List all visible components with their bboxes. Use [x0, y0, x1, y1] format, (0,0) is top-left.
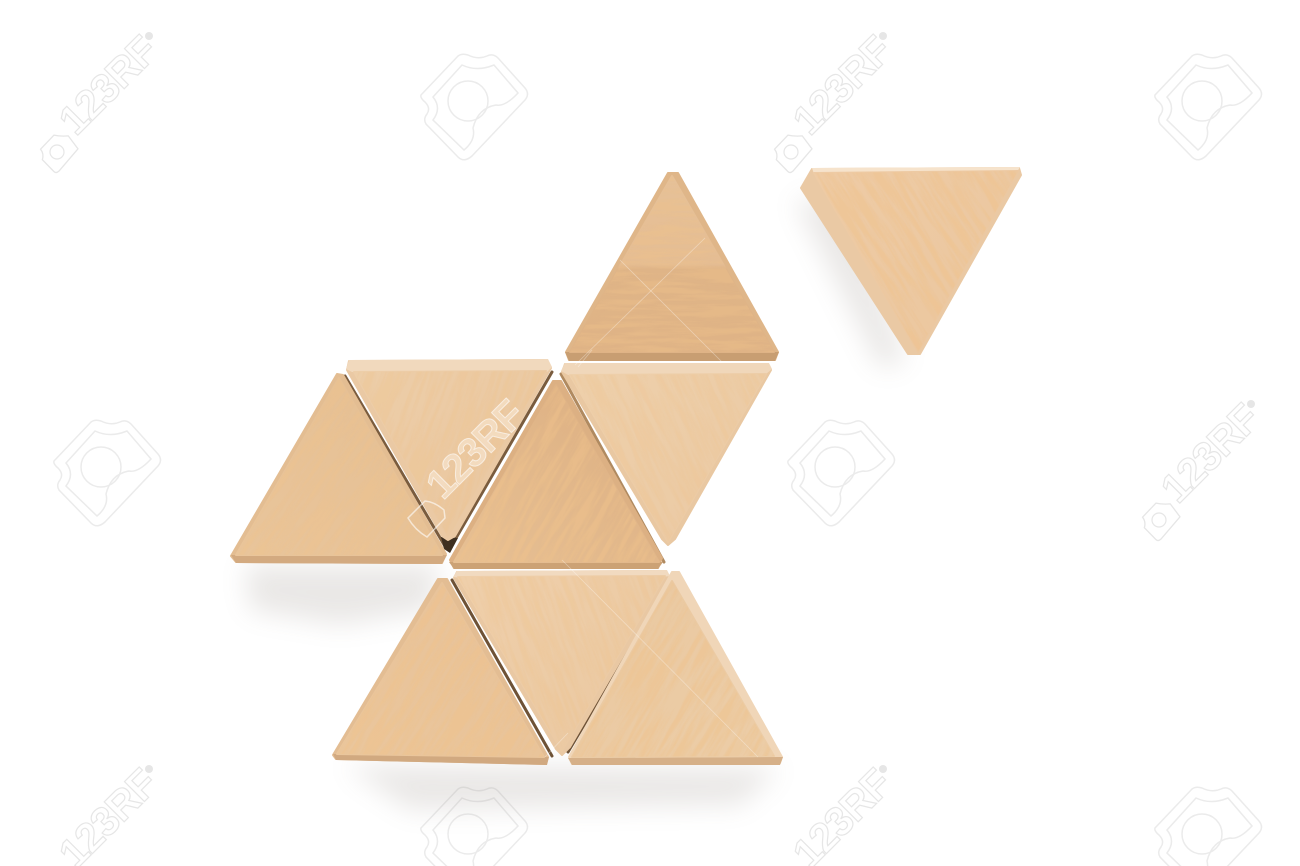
watermark badge: top right — [1155, 54, 1262, 160]
watermark logo: top left: 123RF — [50, 27, 166, 143]
soft shadows — [245, 200, 905, 810]
block: left upright triangle — [230, 373, 447, 564]
block: lower-right upright triangle — [568, 571, 783, 765]
block: lower-left upright triangle — [332, 578, 549, 765]
block: top upright triangle — [560, 170, 785, 361]
watermark logo: top middle: 123RF — [784, 27, 900, 143]
watermark badge: middle centre — [788, 420, 894, 526]
watermark logo: right middle: 123RF — [1152, 395, 1268, 511]
wooden blocks — [230, 167, 1022, 765]
block: lower-middle inverted triangle — [453, 570, 670, 756]
block: separated inverted triangle — [800, 167, 1022, 355]
block: upper-left inverted triangle — [346, 359, 552, 541]
watermark badge: top centre — [421, 54, 528, 160]
cracks between blocks — [345, 372, 671, 756]
block: centre upright triangle (darker) — [449, 380, 663, 569]
thin watermark diagonals on wood — [545, 238, 758, 757]
watermark badge: middle left — [54, 420, 160, 526]
block: upper-right inverted triangle — [561, 363, 772, 546]
watermark badge: bottom centre — [421, 787, 528, 866]
watermark logo on wood: 123RF — [417, 391, 533, 507]
watermark badge: bottom right — [1155, 787, 1262, 866]
